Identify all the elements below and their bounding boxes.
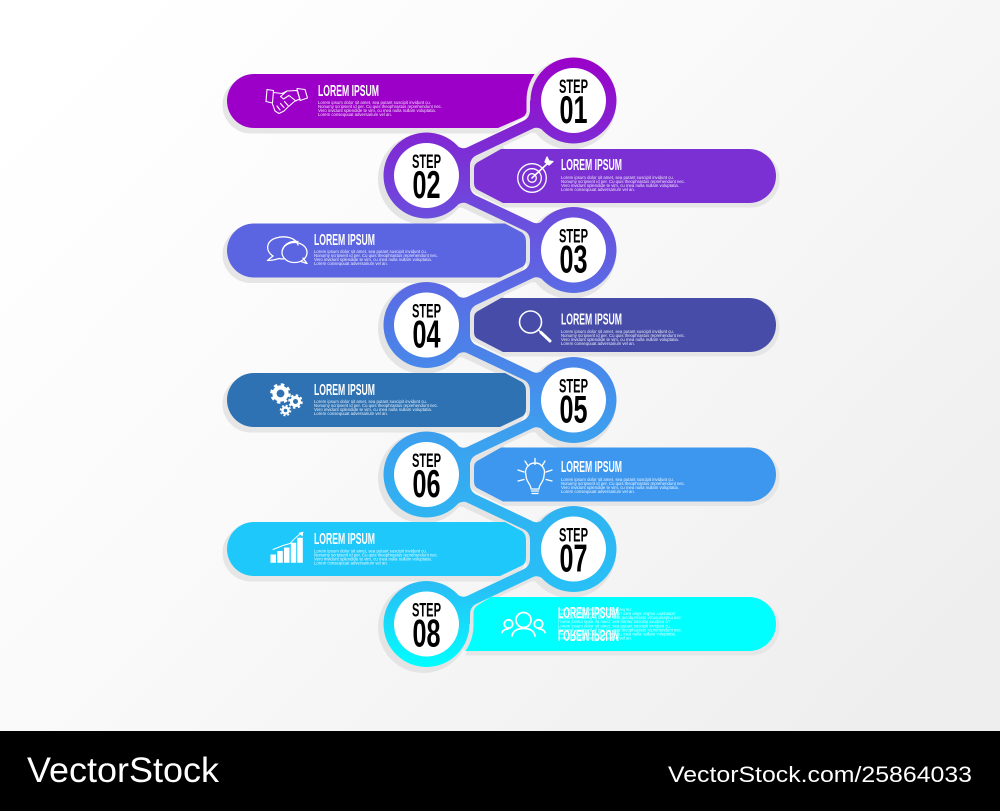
title: LOREM IPSUM <box>561 157 622 174</box>
mirrored body text: Lorem consequuat adversarium vel an. <box>558 608 632 612</box>
body text: Lorem ipsum dolor sit amet, sea putant suscipit invidunt cu. <box>561 329 674 334</box>
title: LOREM IPSUM <box>558 605 619 622</box>
step 03 badge: STEP <box>559 226 588 248</box>
icon: light bulb <box>518 458 552 494</box>
body text <box>314 249 438 266</box>
footer logo text: VectorStock <box>27 751 220 790</box>
panel: step 7 <box>224 522 526 580</box>
step 02 badge <box>384 132 470 218</box>
body text: Vero invidunt splendide te vim, cu mea nulla nullam voluptatia. <box>561 485 679 490</box>
body text: Lorem ipsum dolor sit amet, sea putant suscipit invidunt cu. <box>561 175 674 180</box>
step 04 badge: STEP <box>412 300 441 322</box>
body text: Lorem consequuat adversarium vel an. <box>314 261 388 266</box>
mirrored body text <box>558 608 682 624</box>
panel: step 5 <box>224 373 526 431</box>
icon: growth chart <box>270 532 304 563</box>
body text <box>561 175 685 192</box>
step 06 badge <box>384 432 470 518</box>
footer bar <box>0 731 1000 811</box>
step 05 badge: 05 <box>560 388 588 432</box>
body text: Lorem ipsum dolor sit amet, sea putant suscipit invidunt cu. <box>558 624 671 628</box>
step 05 badge <box>530 357 616 443</box>
body text: Nonumy scripserit id per. Cu quis theophrastus reprehendunt nec. <box>558 628 682 632</box>
step 08 badge: STEP <box>412 600 441 622</box>
step 03 badge: 03 <box>560 238 588 282</box>
body text: Lorem ipsum dolor sit amet, sea putant suscipit invidunt cu. <box>314 249 427 254</box>
body text: Nonumy scripserit id per. Cu quis theophrastus reprehendunt nec. <box>314 552 438 558</box>
body text: Vero invidunt splendide te vim, cu mea nulla nullam voluptatia. <box>314 257 432 262</box>
step 07 badge: 07 <box>560 538 588 580</box>
body text: Nonumy scripserit id per. Cu quis theophrastus reprehendunt nec. <box>561 179 685 184</box>
connector shadows <box>424 106 570 629</box>
body text: Vero invidunt splendide te vim, cu mea nulla nullam voluptatia. <box>558 632 676 636</box>
connector: steps 1 to 8 <box>426 100 574 624</box>
panel: step 4 <box>474 297 778 355</box>
panel: step 3 <box>224 224 526 282</box>
title: LOREM IPSUM <box>314 531 375 548</box>
icon: handshake <box>266 88 308 114</box>
body text: Nonumy scripserit id per. Cu quis theophrastus reprehendunt nec. <box>318 104 442 109</box>
title: LOREM IPSUM <box>561 312 622 328</box>
icon: magnifier <box>520 311 550 341</box>
icon: speech bubbles <box>268 237 307 264</box>
body text: Nonumy scripserit id per. Cu quis theophrastus reprehendunt nec. <box>561 481 685 486</box>
mirrored title: LOREM IPSUM <box>558 626 619 643</box>
body text: Lorem consequuat adversarium vel an. <box>561 489 635 494</box>
step 03 badge <box>530 207 616 293</box>
step 06 badge: 06 <box>412 463 440 506</box>
panel: step 2 <box>474 148 778 206</box>
body text: Lorem consequuat adversarium vel an. <box>561 187 635 192</box>
step 06 badge: STEP <box>412 450 441 472</box>
title: LOREM IPSUM <box>318 83 379 100</box>
step 02 badge: STEP <box>412 151 441 173</box>
body text <box>561 329 685 346</box>
panel: step 6 <box>474 446 778 504</box>
step 01 badge: 01 <box>560 89 588 132</box>
body text: Lorem ipsum dolor sit amet, sea putant suscipit invidunt cu. <box>561 477 674 482</box>
body text: Lorem consequuat adversarium vel an. <box>318 112 392 117</box>
body text <box>561 477 685 494</box>
title: LOREM IPSUM <box>314 382 375 399</box>
step 01 badge: STEP <box>559 76 588 98</box>
circle shadows <box>378 58 616 673</box>
body text: Vero invidunt splendide te vim, cu mea nulla nullam voluptatia. <box>561 337 679 342</box>
step 01 badge <box>530 58 616 144</box>
body text <box>314 399 438 416</box>
step 04 badge <box>384 282 470 368</box>
footer image id: VectorStock.com/25864033 <box>668 762 972 787</box>
step 05 badge: STEP <box>559 376 588 398</box>
body text: Lorem ipsum dolor sit amet, sea putant suscipit invidunt cu. <box>318 100 431 105</box>
panel: step 1 <box>224 74 535 132</box>
body text: Nonumy scripserit id per. Cu quis theophrastus reprehendunt nec. <box>561 333 685 338</box>
step 07 badge <box>530 506 616 592</box>
body text: Vero invidunt splendide te vim, cu mea nulla nullam voluptatia. <box>314 407 432 412</box>
body text: Vero invidunt splendide te vim, cu mea nulla nullam voluptatia. <box>318 108 436 113</box>
body text: Lorem ipsum dolor sit amet, sea putant suscipit invidunt cu. <box>314 548 427 554</box>
body text: Lorem consequuat adversarium vel an. <box>314 560 388 566</box>
title: LOREM IPSUM <box>561 459 622 476</box>
body text <box>558 624 682 640</box>
step 02 badge: 02 <box>412 164 440 207</box>
title: LOREM IPSUM <box>314 232 375 249</box>
body text: Nonumy scripserit id per. Cu quis theophrastus reprehendunt nec. <box>314 403 438 408</box>
step 08 badge: 08 <box>412 612 440 656</box>
body text: Lorem ipsum dolor sit amet, sea putant suscipit invidunt cu. <box>314 399 427 404</box>
body text: Lorem consequuat adversarium vel an. <box>561 341 635 346</box>
panel: step 8 <box>466 596 778 654</box>
mirrored body text: Nonumy scripserit id per. Cu quis theophrastus reprehendunt nec. <box>558 616 682 620</box>
body text: Vero invidunt splendide te vim, cu mea nulla nullam voluptatia. <box>561 183 679 188</box>
step 07 badge: STEP <box>559 524 588 546</box>
body text <box>318 100 442 117</box>
mirrored body text: Vero invidunt splendide te vim, cu mea nulla nullam voluptatia. <box>558 612 676 616</box>
body text <box>314 548 438 566</box>
body text: Vero invidunt splendide te vim, cu mea nulla nullam voluptatia. <box>314 556 432 562</box>
icon: people <box>502 612 545 636</box>
body text: Lorem consequuat adversarium vel an. <box>558 636 632 640</box>
step 04 badge: 04 <box>412 314 441 356</box>
body text: Nonumy scripserit id per. Cu quis theophrastus reprehendunt nec. <box>314 253 438 258</box>
icon: gears <box>272 384 302 416</box>
icon: target <box>518 157 553 192</box>
mirrored body text: Lorem ipsum dolor sit amet, sea putant suscipit invidunt cu. <box>558 620 671 624</box>
body text: Lorem consequuat adversarium vel an. <box>314 411 388 416</box>
step 08 badge <box>384 581 470 667</box>
